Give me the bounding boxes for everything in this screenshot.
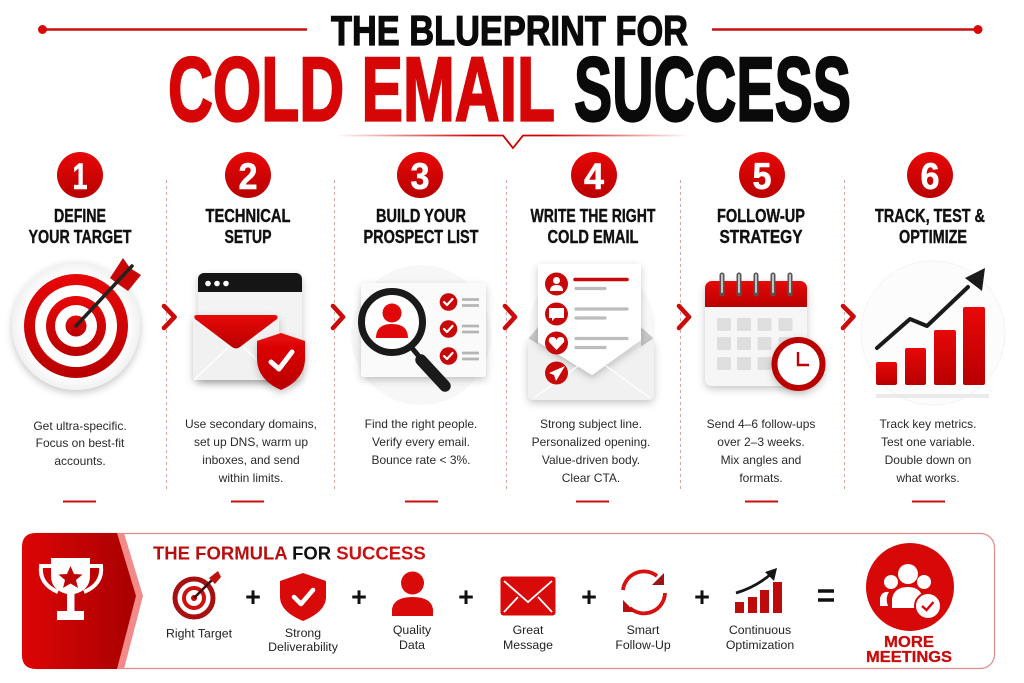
accent dash 5 [745,500,778,502]
number badge 4 [571,152,617,198]
description 1: Focus on best-fit [36,436,125,450]
accent dash 2 [231,500,264,502]
item: strong deliverability [268,573,339,654]
operator plus 2: + [351,582,367,612]
result: more meetings [866,543,954,666]
heading 2 [206,206,290,247]
operator plus 3: + [458,582,474,612]
description 5: Mix angles and [721,453,801,467]
description 6: Track key metrics. [880,417,976,431]
operator equals [818,591,834,600]
description 3: Bounce rate < 3%. [371,453,471,467]
heading 3 [364,206,479,247]
description 2: inboxes, and send [202,453,300,467]
arrow 5 [843,306,854,328]
result: more meetings: MORE [884,634,934,651]
description 5: formats. [739,471,783,485]
description 5 [707,417,815,485]
heading 4 [530,206,656,247]
formula heading: THE FORMULA FOR SUCCESS [153,542,426,564]
title: THE BLUEPRINT FOR [331,7,688,54]
arrow 3 [505,306,515,328]
description 2 [185,417,317,485]
number badge 3 [397,152,443,198]
item: quality data: Data [399,638,425,652]
step 2: technical setup [185,152,317,502]
result: more meetings: MEETINGS [866,649,952,666]
heading 6: TRACK, TEST & [875,206,985,226]
description 5: Send 4–6 follow-ups [707,417,815,431]
item: right target [166,571,233,640]
heading 2: SETUP [224,227,272,247]
description 3: Find the right people. [365,417,477,431]
number badge 2: 2 [238,156,258,197]
item: continuous optimization [726,568,794,652]
item: great message: Message [503,638,553,652]
step 6: track, test and optimize [861,152,1005,502]
item: smart follow-up: Follow-Up [615,638,671,652]
description 6 [880,417,976,485]
heading 6 [875,206,985,247]
number badge 1: 1 [72,156,88,197]
description 4: Personalized opening. [532,435,650,449]
item: quality data [392,572,433,652]
number badge 6: 6 [920,156,940,197]
number badge 1 [57,152,103,198]
description 6: Double down on [885,453,971,467]
icon: email with letter [528,264,655,400]
item: strong deliverability: Deliverability [268,640,339,654]
step 1: define your target [12,152,141,502]
description 2: Use secondary domains, [185,417,317,431]
operator plus 4: + [581,582,597,612]
accent dash 3 [405,500,438,502]
heading 3: BUILD YOUR [376,206,466,226]
item: right target: Right Target [166,626,233,640]
title: COLD EMAIL [168,40,555,140]
operator plus 1: + [245,582,261,612]
number badge 5 [739,152,785,198]
description 3: Verify every email. [372,435,470,449]
item: continuous optimization: Continuous [729,623,791,637]
item: smart follow-up [615,571,671,652]
heading 4: COLD EMAIL [548,227,638,247]
number badge 6 [907,152,953,198]
title [168,7,851,140]
heading 1: DEFINE [54,206,106,226]
arrow 2 [333,306,343,328]
item: smart follow-up: Smart [627,623,660,637]
accent dash 6 [912,500,945,502]
icon: secure email window [193,273,305,390]
description 4: Strong subject line. [540,417,642,431]
description 5: over 2–3 weeks. [717,435,805,449]
description 3 [365,417,477,467]
trophy banner [22,533,143,669]
description 1: accounts. [54,454,106,468]
heading 1: YOUR TARGET [28,227,132,247]
arrow 4 [679,306,689,328]
heading 5: STRATEGY [720,227,802,247]
panel: the formula for success [22,533,994,669]
item: quality data: Quality [393,623,432,637]
item: great message: Great [513,623,544,637]
description 4: Value-driven body. [542,453,640,467]
number badge 3: 3 [410,156,430,197]
heading 5 [717,206,805,247]
icon: growth chart [861,261,1005,405]
description 2: set up DNS, warm up [194,435,308,449]
description 6: Test one variable. [881,435,975,449]
heading 1 [28,206,132,247]
operator plus 5: + [694,582,710,612]
header rule: right [712,25,982,34]
item: continuous optimization: Optimization [726,638,794,652]
step 5: follow-up strategy [705,152,822,502]
description 1 [33,419,127,468]
description 1: Get ultra-specific. [33,419,127,433]
title pointer [335,136,690,148]
item: great message [500,576,556,652]
header rule: left [38,25,307,34]
step 3: build your prospect list [351,152,491,502]
icon: target with arrow [12,258,141,390]
number badge 5: 5 [752,156,772,197]
description 2: within limits. [218,471,283,485]
accent dash 1 [63,500,96,502]
description 4 [532,417,650,485]
title: SUCCESS [574,40,851,140]
arrow 1 [164,306,174,328]
accent dash 4 [576,500,609,502]
icon: calendar with clock [705,275,822,388]
heading 4: WRITE THE RIGHT [530,206,656,226]
heading 2: TECHNICAL [206,206,290,226]
step 4: write the right cold email [528,152,656,502]
heading 3: PROSPECT LIST [364,227,479,247]
heading 6: OPTIMIZE [899,227,967,247]
number badge 4: 4 [584,156,604,197]
heading 5: FOLLOW-UP [717,206,805,226]
number badge 2 [225,152,271,198]
description 6: what works. [895,471,960,485]
icon: magnifier and verified list [351,265,491,405]
description 4: Clear CTA. [562,471,620,485]
item: strong deliverability: Strong [285,626,321,640]
